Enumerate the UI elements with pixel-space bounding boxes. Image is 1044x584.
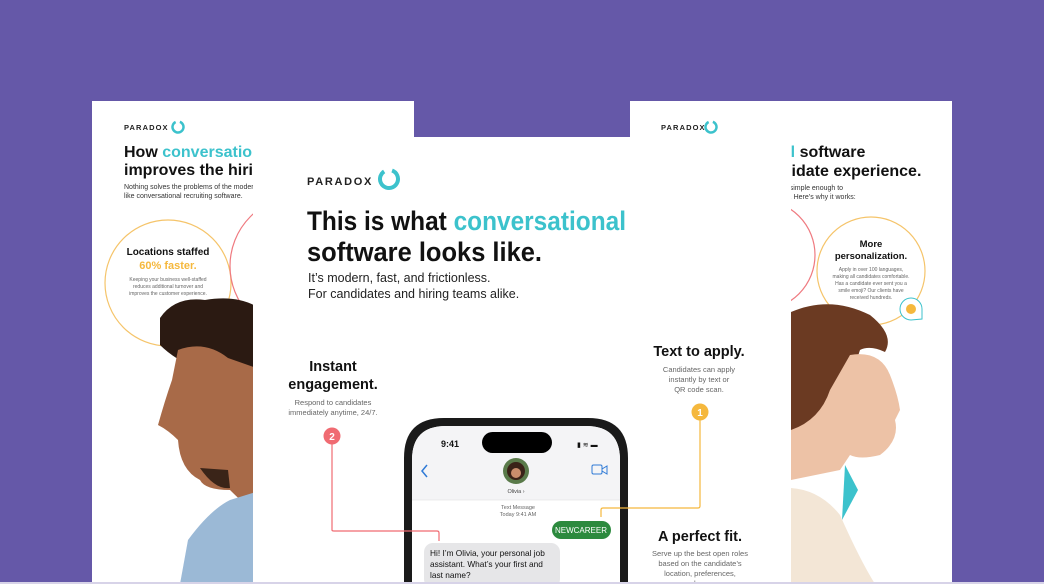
heading: left page: How conversational: [124, 144, 275, 161]
circle: locations staffed: Keeping your business well-staffed: [129, 277, 207, 283]
callout: a perfect fit: A perfect fit.: [658, 529, 742, 545]
text: left intro: like conversational recruiting software.: [124, 193, 243, 200]
callout: instant engagement: Respond to candidates: [295, 398, 372, 407]
bubble: newcareer: [552, 521, 611, 539]
title: [307, 206, 626, 267]
icon: back arrow: [422, 465, 427, 477]
phone: [404, 418, 628, 584]
circle: more personalization: personalization.: [835, 251, 907, 262]
subtitle: It’s modern, fast, and frictionless.: [308, 271, 490, 285]
circle: locations staffed: 60% faster.: [139, 260, 197, 272]
logo: center: PARADOX: [307, 176, 373, 188]
callout: a perfect fit: [652, 529, 748, 584]
icon: avatar olivia: [503, 458, 529, 495]
timestamp: Text Message: [501, 505, 535, 511]
bubble: olivia message: last name?: [430, 570, 471, 580]
panel: right page: [630, 101, 952, 584]
text: right intro: ers. Here’s why it works:: [780, 194, 856, 201]
circle: more personalization: More: [860, 239, 882, 250]
heading: right page: ndidate experience.: [772, 163, 921, 180]
callout: instant engagement: immediately anytime, 24/7.: [288, 408, 378, 417]
title: software looks like.: [307, 237, 542, 267]
callout: text to apply: Candidates can apply: [663, 365, 735, 374]
illustration: man profile: [158, 298, 262, 584]
callout: a perfect fit: location, preferences,: [664, 569, 736, 578]
bubble: newcareer: NEWCAREER: [555, 526, 607, 535]
callout: text to apply: QR code scan.: [674, 385, 724, 394]
timestamp: Today 9:41 AM: [500, 512, 537, 518]
arrow: connector 1: [601, 404, 708, 517]
circle: more personalization: [705, 200, 925, 325]
circle: locations staffed: reduces additional turnover and: [133, 284, 203, 290]
circle: locations staffed: Locations staffed: [127, 247, 209, 258]
bubble: olivia message: assistant. What’s your first and: [430, 559, 543, 569]
icon: avatar olivia: Olivia ›: [507, 489, 525, 495]
logo: left page: [124, 120, 185, 134]
heading: right page: [772, 144, 921, 180]
logo: right page: [661, 120, 718, 134]
circle: more personalization: Apply in over 100 languages,: [839, 267, 903, 273]
callout: text to apply: instantly by text or: [669, 375, 730, 384]
circle: locations staffed: [105, 196, 370, 346]
panel: left page: [92, 101, 414, 584]
phone status bar: ▮ ≋ ▬: [577, 442, 598, 449]
text: right intro: nd simple enough to: [780, 185, 843, 192]
illustration: woman profile: [791, 304, 900, 584]
text: right intro: [780, 185, 856, 201]
arrow: connector 2: 2: [329, 432, 335, 443]
circle: more personalization: Has a candidate ever sent you a: [835, 281, 907, 287]
logo: center: [307, 167, 401, 191]
bubble: olivia message: [424, 543, 560, 584]
circle: more personalization: smile emoji? Our clients have: [838, 288, 904, 294]
heading: left page: [124, 144, 275, 179]
icon: video: [592, 465, 607, 474]
text: left intro: Nothing solves the problems of the modern: [124, 184, 258, 191]
heading: left page: improves the hiring: [124, 162, 272, 179]
icon: smile emoji bubble: [900, 298, 922, 320]
phone status bar: 9:41: [441, 439, 459, 449]
circle: more personalization: making all candidates comfortable.: [832, 274, 910, 280]
callout: text to apply: Text to apply.: [653, 344, 745, 360]
logo: right page: PARADOX: [661, 123, 706, 132]
phone status bar: [441, 432, 598, 453]
logo: left page: PARADOX: [124, 123, 169, 132]
callout: text to apply: [653, 344, 745, 394]
callout: a perfect fit: based on the candidate’s: [658, 559, 742, 568]
callout: instant engagement: engagement.: [288, 377, 378, 393]
panel: center page: [253, 137, 791, 584]
arrow: connector 1: 1: [697, 408, 703, 419]
bubble: olivia message: Hi! I’m Olivia, your personal job: [430, 548, 545, 558]
subtitle: For candidates and hiring teams alike.: [308, 287, 519, 301]
text: left intro: [124, 184, 258, 200]
timestamp: [500, 505, 537, 518]
callout: instant engagement: Instant: [309, 359, 357, 375]
subtitle: [308, 271, 519, 301]
callout: a perfect fit: Serve up the best open roles: [652, 549, 748, 558]
callout: instant engagement: [288, 359, 378, 417]
circle: more personalization: received hundreds.: [850, 295, 892, 301]
arrow: connector 2: [324, 428, 439, 541]
circle: locations staffed: improves the customer experience.: [129, 291, 207, 297]
heading: right page: nal software: [772, 144, 865, 161]
title: This is what conversational: [307, 206, 626, 236]
